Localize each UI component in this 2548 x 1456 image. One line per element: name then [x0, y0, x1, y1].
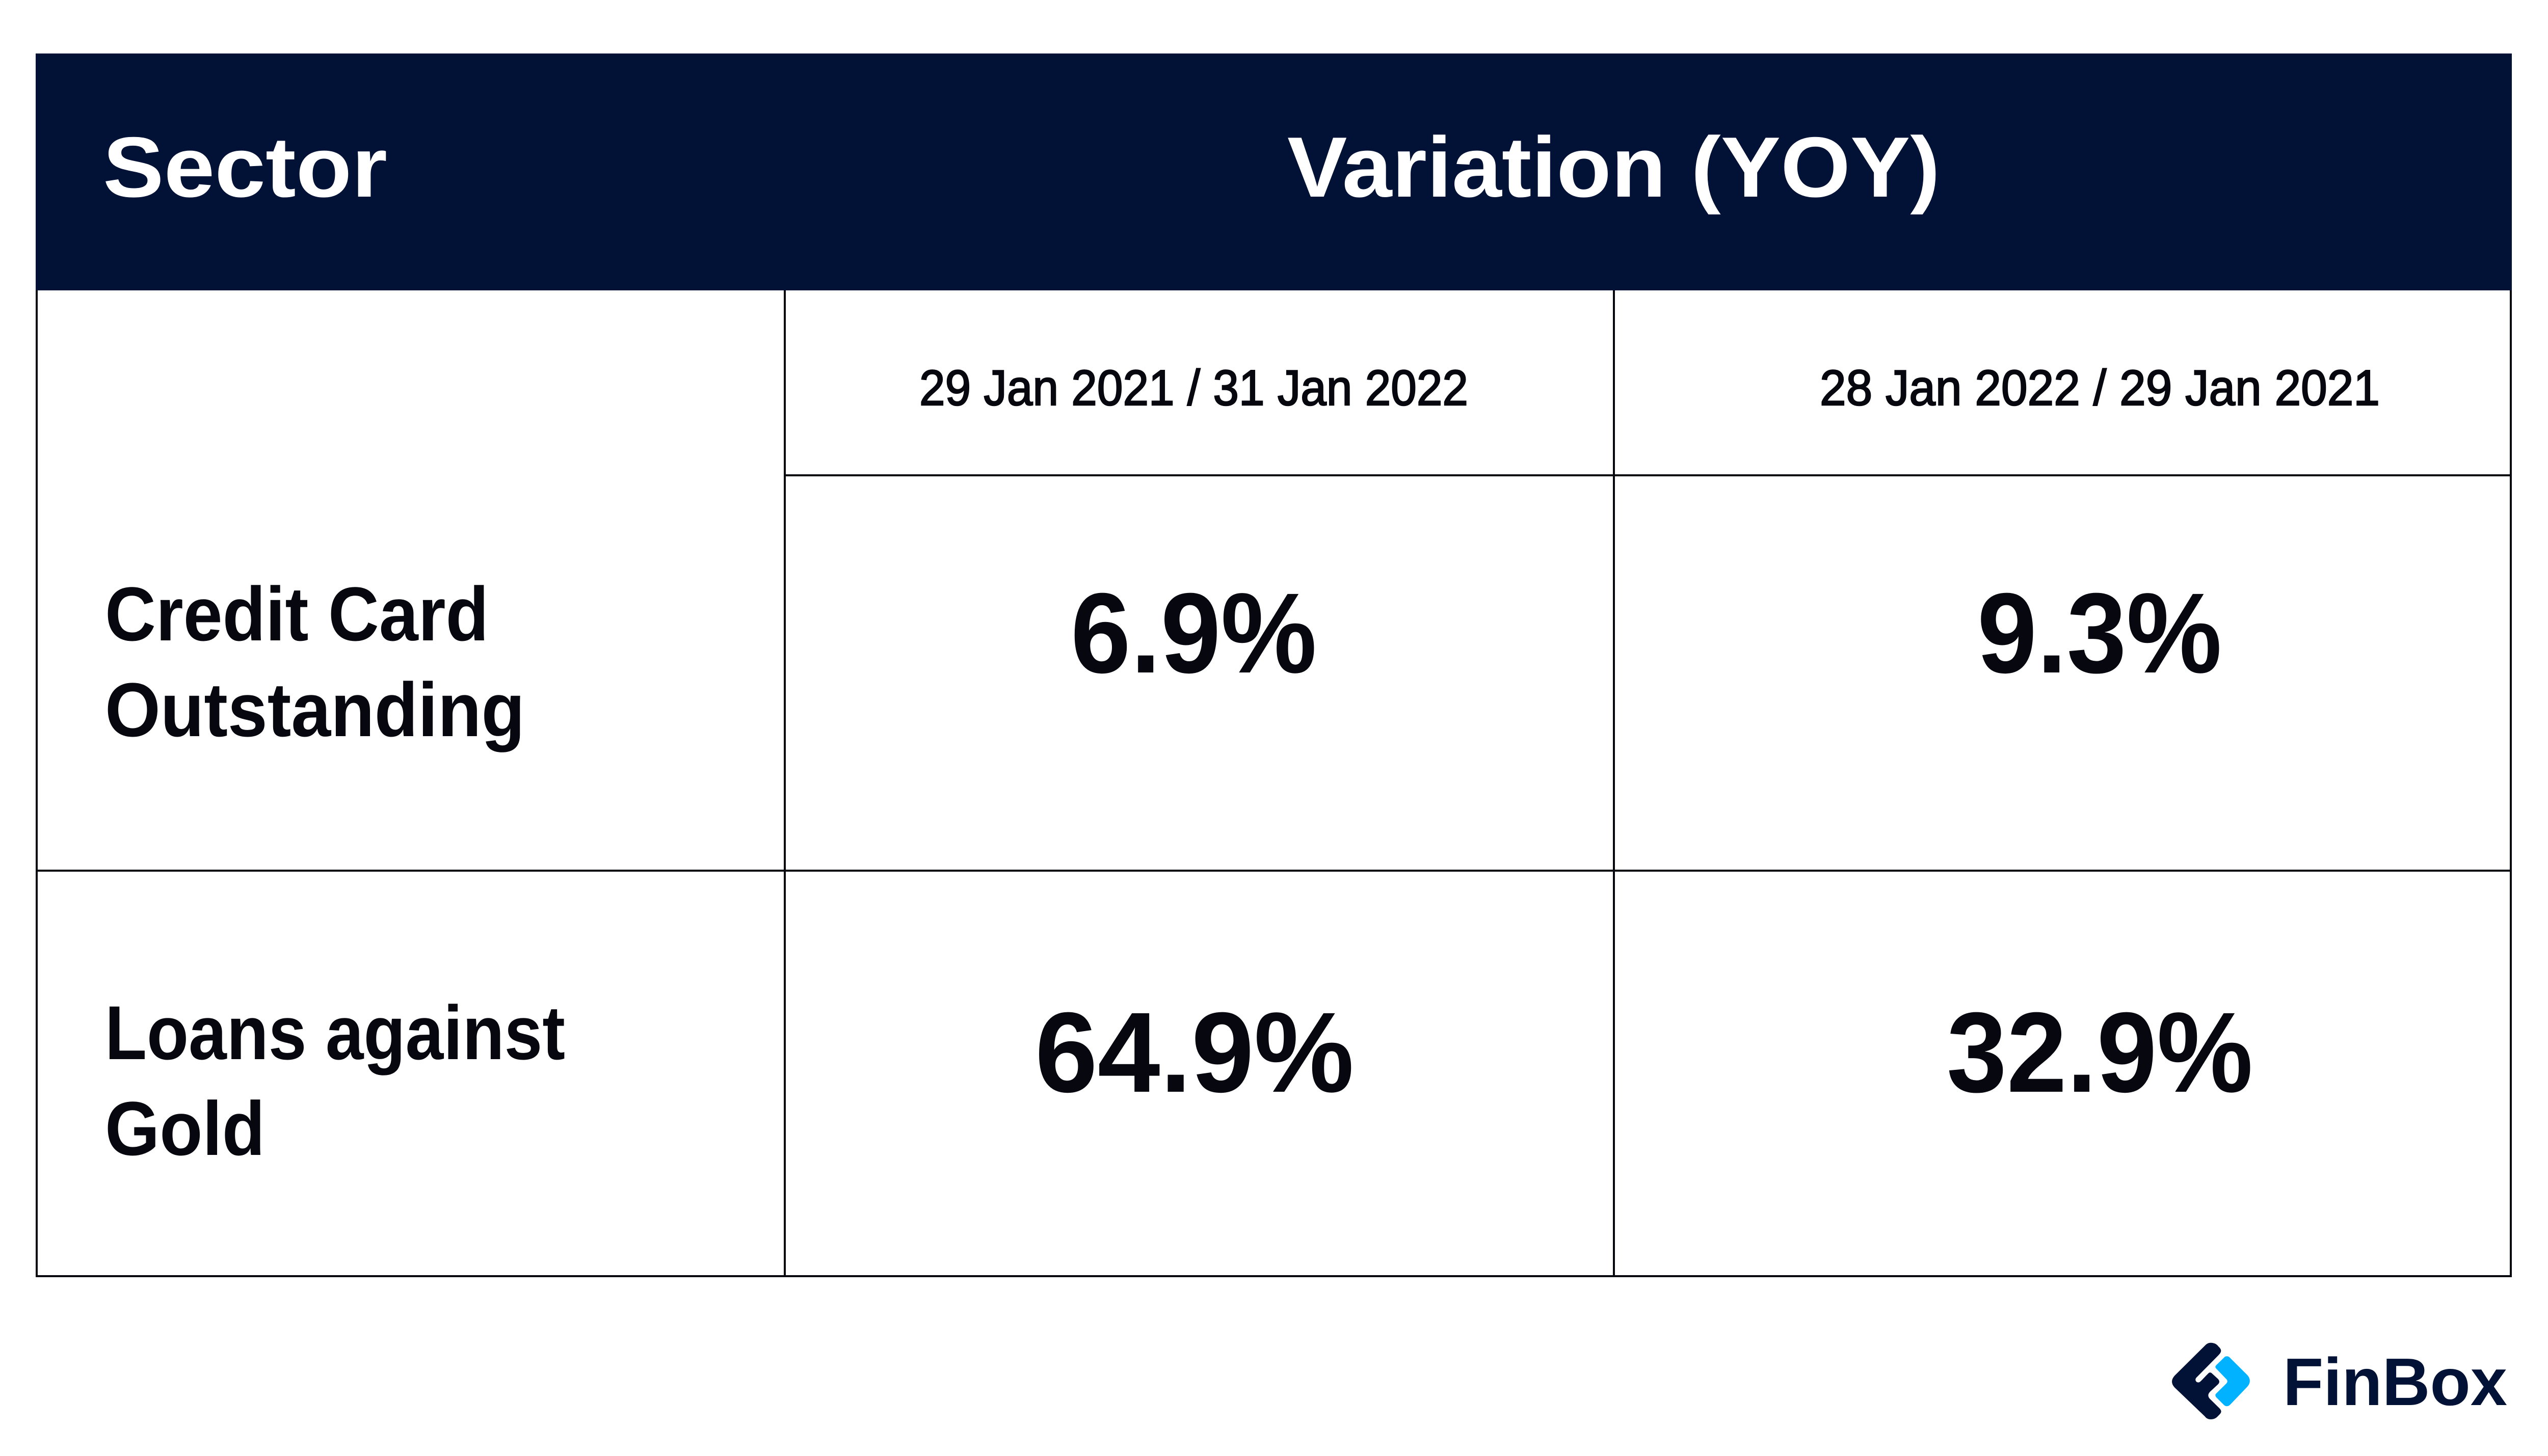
value: 9.3%: 9.3% [1977, 570, 2222, 697]
row label: Loans against Gold [105, 990, 565, 1171]
icon: FinBox mark [2172, 1343, 2250, 1419]
wordmark: FinBox [2283, 1344, 2507, 1419]
date label: column 3: 28 Jan 2022 / 29 Jan 2021 [1820, 360, 2380, 416]
row label: Credit Card Outstanding [105, 571, 525, 752]
value: 6.9%: 6.9% [1071, 570, 1317, 697]
heading: Sector: Sector [103, 119, 387, 215]
header band [36, 53, 2512, 290]
logo: FinBox [2172, 1343, 2507, 1419]
row label: Credit Card Outstanding: Outstanding [105, 667, 525, 752]
row label: Loans against Gold: Gold [105, 1086, 265, 1171]
date label: column 2: 29 Jan 2021 / 31 Jan 2022 [919, 360, 1468, 416]
value: 64.9%: 64.9% [1035, 989, 1354, 1116]
heading: Variation (YOY): Variation (YOY) [1287, 119, 1940, 215]
row label: Loans against Gold: Loans against [105, 990, 565, 1075]
value: 32.9%: 32.9% [1947, 989, 2253, 1116]
row label: Credit Card Outstanding: Credit Card [105, 571, 489, 657]
